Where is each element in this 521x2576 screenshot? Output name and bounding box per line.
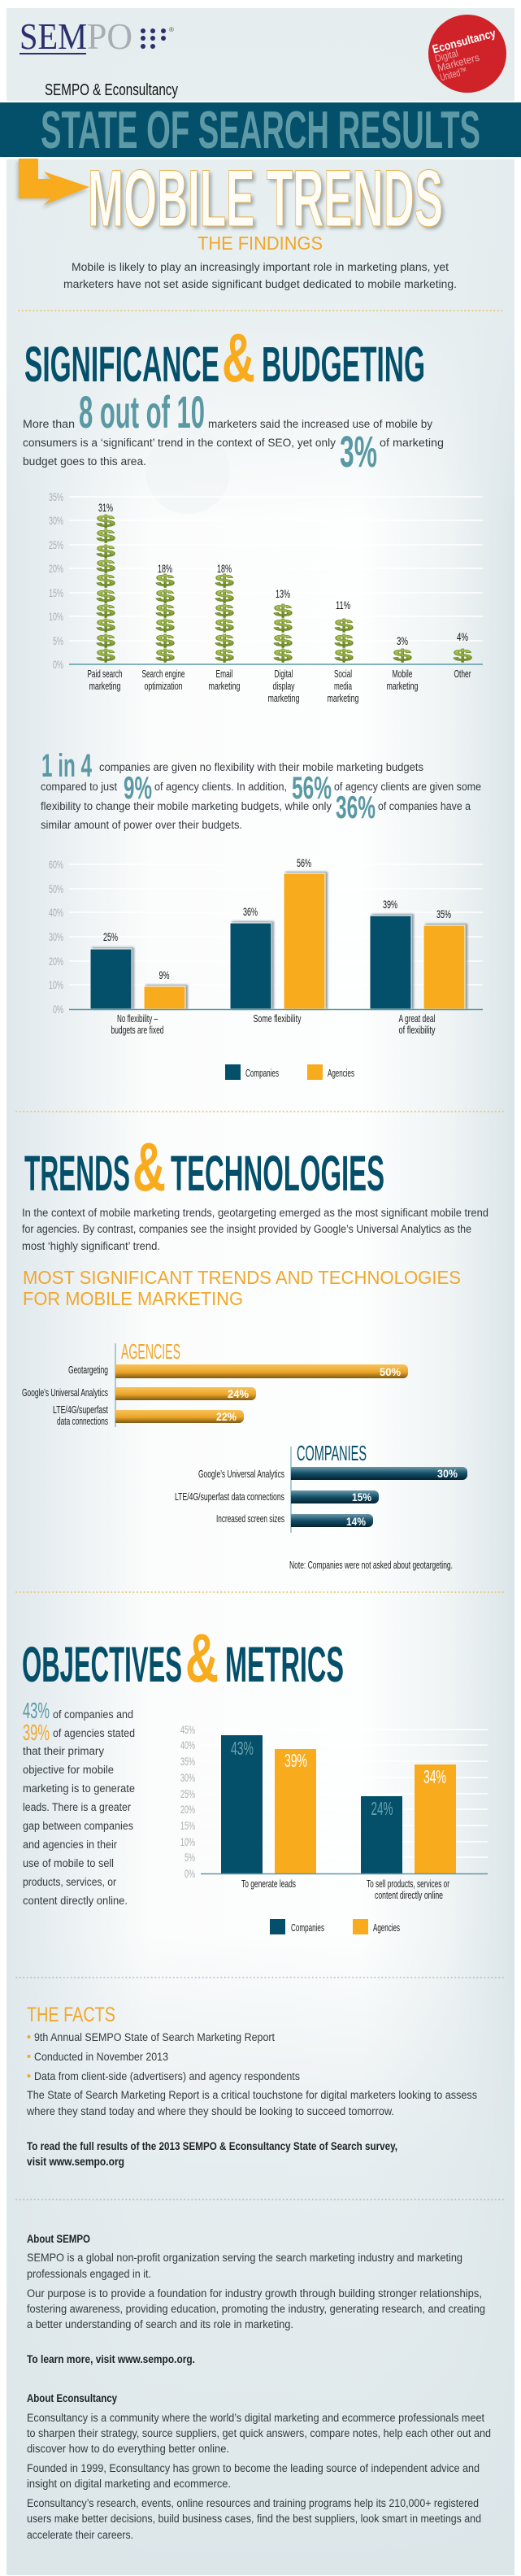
text: objectives paragraph: gap between companies <box>23 1820 133 1832</box>
labels: dollar chart categories: marketing <box>268 692 299 704</box>
text: 8 out of 10 paragraph: consumers is a ‘significant’ trend in the context of SEO, yet only <box>23 437 336 449</box>
labels: dollar chart categories: Mobile <box>392 668 413 680</box>
chart: agencies trends: data connections <box>57 1415 108 1427</box>
dollars: digital display: $ <box>273 602 293 620</box>
chart: primary objectives: 15% <box>180 1819 195 1832</box>
chart: companies trends: 30% <box>437 1467 458 1480</box>
heading: Trends & Technologies: TRENDS <box>24 1146 130 1201</box>
text: 8 out of 10 paragraph: More than <box>23 418 75 430</box>
chart: marketing budget share (dollar stacks): 25% <box>49 538 63 551</box>
chart: primary objectives: 20% <box>180 1803 195 1816</box>
bars: agencies <box>275 1749 456 1873</box>
chart: companies trends: 15% <box>352 1490 371 1503</box>
text: about SEMPO <box>27 2233 485 2365</box>
labels: dollar chart categories: Search engine <box>141 668 185 680</box>
dollars: social media <box>334 616 354 664</box>
values: dollar chart <box>98 501 468 647</box>
heading: Significance & Budgeting: SIGNIFICANCE <box>24 337 219 392</box>
text: about SEMPO: Our purpose is to provide a foundation for industry growth through building stronger relationships, <box>27 2287 482 2300</box>
text: 8 out of 10 paragraph: budget goes to this area. <box>23 455 146 468</box>
text: objectives paragraph: 43% <box>23 1698 50 1723</box>
bars: agencies <box>144 873 465 1009</box>
labels: dollar chart categories <box>88 668 471 704</box>
legend: objectives chart <box>270 1919 400 1934</box>
text: 1 in 4 paragraph <box>41 748 481 831</box>
list: facts bullets: Data from client-side (advertisers) and agency respondents <box>34 2070 300 2082</box>
text: objectives paragraph: and agencies in their <box>23 1838 117 1851</box>
chart: budget flexibility: 20% <box>49 955 63 968</box>
chart: budget flexibility: 30% <box>49 930 63 943</box>
chart: primary objectives: 40% <box>180 1738 195 1751</box>
text: 1 in 4 paragraph: 36% <box>336 790 376 825</box>
dollars: email marketing: $ <box>215 602 234 620</box>
text: about Econsultancy <box>27 2392 491 2541</box>
list: facts bullets: Conducted in November 2013 <box>34 2051 168 2063</box>
labels: flexibility categories: A great deal <box>398 1012 436 1025</box>
text: trends paragraph: for agencies. By contrast, companies see the insight provided by Google’s Universal Analytics as the <box>22 1223 471 1235</box>
dollars: search engine optimization: $ <box>155 632 175 650</box>
values: flexibility chart: 25% <box>103 930 118 943</box>
labels: dollar chart categories: marketing <box>89 680 120 692</box>
legend: objectives chart: Agencies <box>373 1921 400 1934</box>
legend: objectives chart: Companies <box>291 1921 324 1934</box>
chart: primary objectives: 25% <box>180 1787 195 1800</box>
dollars: paid search: $ <box>96 587 115 605</box>
text: call to action <box>27 2140 397 2168</box>
logo: Econsultancy badge <box>428 15 506 93</box>
text: intro paragraph: Mobile is likely to play an increasingly important role in marketing plans, yet <box>72 261 449 273</box>
text: objectives paragraph <box>23 1698 135 1907</box>
text: objectives paragraph: marketing is to generate <box>23 1782 135 1795</box>
text: intro paragraph <box>63 261 457 290</box>
values: dollar chart: 4% <box>457 630 468 643</box>
chart: marketing budget share (dollar stacks): 0% <box>53 658 63 671</box>
chart: marketing budget share (dollar stacks): 5% <box>53 634 63 647</box>
text: 1 in 4 paragraph: 56% <box>292 771 332 806</box>
dollars: email marketing: $ <box>215 646 234 664</box>
heading: Trends & Technologies <box>24 1129 384 1205</box>
chart: marketing budget share (dollar stacks): 20% <box>49 562 63 575</box>
text: about Econsultancy: Econsultancy is a community where the world’s digital marketing and ecommerce professionals meet <box>27 2412 484 2424</box>
text: 1 in 4 paragraph: of companies have a <box>378 800 471 812</box>
list: facts bullets: 9th Annual SEMPO State of Search Marketing Report <box>34 2031 275 2043</box>
text: objectives paragraph: products, services, or <box>23 1876 116 1888</box>
values: objectives chart <box>231 1738 446 1819</box>
chart: primary objectives: 45% <box>180 1723 195 1736</box>
dollars: paid search: $ <box>96 632 115 650</box>
legend: flexibility chart: Agencies <box>328 1067 354 1079</box>
dollars: paid search: $ <box>96 512 115 530</box>
text: about Econsultancy: Founded in 1999, Econsultancy has grown to become the leading source of independent advice and <box>27 2462 480 2474</box>
logo: SEMPO: SEM <box>20 15 87 57</box>
text: objectives paragraph: use of mobile to sell <box>23 1857 114 1869</box>
chart: marketing budget share (dollar stacks): 30% <box>49 514 63 527</box>
labels: dollar chart categories: Email <box>216 668 233 680</box>
chart: primary objectives <box>180 1723 488 1934</box>
dollars: email marketing: $ <box>215 632 234 650</box>
dollars: digital display: $ <box>273 646 293 664</box>
text: objectives paragraph: objective for mobile <box>23 1764 114 1776</box>
text: trends paragraph: In the context of mobile marketing trends, geotargeting emerged as the most significant mobile trend <box>22 1207 488 1219</box>
values: dollar chart: 31% <box>98 501 113 514</box>
logo: SEMPO: PO <box>87 15 132 57</box>
labels: flexibility categories: of flexibility <box>398 1024 436 1036</box>
dollars: paid search: $ <box>96 572 115 590</box>
heading: most significant trends <box>23 1267 461 1309</box>
dollars: email marketing: $ <box>215 616 234 634</box>
values: dollar chart: 3% <box>397 634 408 647</box>
labels: objectives categories: To generate leads <box>241 1878 296 1890</box>
dollars: search engine optimization <box>155 572 175 664</box>
text: SEMPO & Econsultancy: SEMPO & Econsultancy <box>45 81 178 99</box>
heading: Trends & Technologies: & <box>132 1129 166 1205</box>
text: objectives paragraph: content directly online. <box>23 1895 128 1907</box>
text: objectives paragraph: of companies and <box>53 1708 133 1721</box>
heading: Objectives & Metrics: OBJECTIVES <box>22 1637 182 1692</box>
values: objectives chart: 24% <box>371 1798 393 1819</box>
dollars: paid search: $ <box>96 542 115 560</box>
text: objectives paragraph: 39% <box>23 1720 50 1745</box>
chart: companies trends: Google’s Universal Analytics <box>198 1468 284 1480</box>
labels: dollar chart categories: Social <box>334 668 352 680</box>
dollars: digital display: $ <box>273 632 293 650</box>
heading: Significance & Budgeting <box>24 320 425 396</box>
legend: flexibility chart: Companies <box>245 1067 279 1079</box>
values: dollar chart: 18% <box>217 562 232 575</box>
text: 1 in 4 paragraph: similar amount of power over their budgets. <box>41 819 242 831</box>
bars: companies <box>90 916 411 1009</box>
chart: companies trends: LTE/4G/superfast data connections <box>175 1490 284 1503</box>
chart: companies trends: Increased screen sizes <box>216 1512 284 1525</box>
text: about Econsultancy: About Econsultancy <box>27 2392 117 2404</box>
chart: agencies trends <box>22 1339 408 1427</box>
chart: companies trends: 14% <box>346 1515 366 1528</box>
dollars: paid search <box>96 512 115 664</box>
labels: flexibility categories: No flexibility – <box>117 1012 158 1025</box>
chart: companies trends <box>175 1441 467 1533</box>
chart: budget flexibility: 0% <box>53 1003 63 1016</box>
list: facts bullets <box>28 2031 300 2082</box>
logo: Econsultancy badge: Marketers <box>436 52 480 74</box>
text: about SEMPO: a better understanding of search and its role in marketing. <box>27 2318 293 2330</box>
text: objectives paragraph: of agencies stated <box>53 1727 135 1739</box>
dollars: social media: $ <box>334 616 354 634</box>
chart: budget flexibility <box>49 856 483 1080</box>
text: about SEMPO: About SEMPO <box>27 2233 90 2245</box>
text: about Econsultancy: insight on digital marketing and ecommerce. <box>27 2478 231 2490</box>
text: objectives paragraph: that their primary <box>23 1745 104 1757</box>
values: flexibility chart: 56% <box>297 856 311 869</box>
values: dollar chart: 18% <box>158 562 172 575</box>
labels: dollar chart categories: media <box>334 680 352 692</box>
chart: agencies trends: AGENCIES <box>121 1339 180 1364</box>
text: 1 in 4 paragraph: of agency clients. In addition, <box>154 781 287 793</box>
heading: Objectives & Metrics: METRICS <box>225 1637 344 1692</box>
values: dollar chart: 11% <box>336 598 350 611</box>
dollars: digital display <box>273 602 293 664</box>
dollars: email marketing: $ <box>215 587 234 605</box>
text: 1 in 4 paragraph: companies are given no flexibility with their mobile marketing budgets <box>99 761 423 773</box>
dollars: search engine optimization: $ <box>155 616 175 634</box>
labels: objectives categories: content directly online <box>375 1889 443 1901</box>
text: 8 out of 10 paragraph <box>23 386 444 476</box>
dollars: search engine optimization: $ <box>155 572 175 590</box>
labels: dollar chart categories: marketing <box>387 680 418 692</box>
text: about SEMPO: To learn more, visit www.sempo.org. <box>27 2353 195 2365</box>
chart: budget flexibility: 50% <box>49 882 63 895</box>
chart: budget flexibility: 40% <box>49 906 63 919</box>
text: trends paragraph <box>22 1207 488 1252</box>
chart: agencies trends: Geotargeting <box>68 1364 108 1376</box>
labels: flexibility categories: Some flexibility <box>254 1012 302 1025</box>
dollars: search engine optimization: $ <box>155 602 175 620</box>
legend: flexibility chart <box>225 1064 354 1080</box>
labels: dollar chart categories: marketing <box>208 680 241 692</box>
panel: the facts <box>26 2004 477 2168</box>
logo: Econsultancy badge: Digital <box>434 47 459 64</box>
labels: dollar chart categories: Other <box>454 668 471 680</box>
chart: agencies trends: LTE/4G/superfast <box>53 1403 108 1416</box>
values: objectives chart: 34% <box>423 1766 446 1787</box>
text: about Econsultancy: discover how to do everything better online. <box>27 2443 229 2455</box>
chart: agencies trends: 22% <box>216 1410 237 1423</box>
text: about Econsultancy: to sharpen their strategy, source suppliers, get quick answers, compare notes, help each other out and <box>27 2427 491 2439</box>
heading: Significance & Budgeting: & <box>222 320 255 396</box>
chart: companies trends: COMPANIES <box>297 1441 367 1465</box>
dollars: paid search: $ <box>96 602 115 620</box>
text: 8 out of 10 paragraph: marketers said the increased use of mobile by <box>208 418 432 430</box>
chart: budget flexibility: 60% <box>49 858 63 871</box>
chart: marketing budget share (dollar stacks): 35% <box>49 490 63 503</box>
labels: flexibility categories <box>111 1012 436 1036</box>
bar shadows <box>92 872 467 1009</box>
dollars: social media: $ <box>334 646 354 664</box>
text: 8 out of 10 paragraph: 3% <box>340 428 377 476</box>
text: 8 out of 10 paragraph: 8 out of 10 <box>79 386 205 437</box>
values: dollar chart: 13% <box>276 587 290 600</box>
values: flexibility chart: 35% <box>436 907 451 920</box>
heading: Objectives & Metrics: & <box>185 1620 219 1696</box>
dollars: search engine optimization: $ <box>155 646 175 664</box>
values: flexibility chart: 39% <box>383 898 397 911</box>
values: flexibility chart: 36% <box>243 905 258 918</box>
text: objectives paragraph: leads. There is a greater <box>23 1801 131 1813</box>
logo: Econsultancy badge: United™ <box>439 65 468 83</box>
text: intro paragraph: marketers have not set aside significant budget dedicated to mobile marketing. <box>63 278 457 290</box>
labels: dollar chart categories: display <box>273 680 295 692</box>
values: flexibility chart <box>103 856 451 981</box>
text: 1 in 4 paragraph: 9% <box>124 771 152 806</box>
text: trends paragraph: most ‘highly significant’ trend. <box>22 1240 160 1252</box>
text: report description <box>26 2089 477 2117</box>
text: about SEMPO: SEMPO is a global non-profit organization serving the search marketing industry and marketing <box>27 2252 462 2264</box>
text: 8 out of 10 paragraph: of marketing <box>380 437 444 449</box>
dollars: paid search: $ <box>96 557 115 575</box>
chart: primary objectives: 30% <box>180 1771 195 1784</box>
dollars: paid search: $ <box>96 616 115 634</box>
values: objectives chart: 39% <box>284 1750 307 1771</box>
heading: The Facts: THE FACTS <box>27 2004 115 2026</box>
text: about Econsultancy: users make better decisions, build business cases, find the best suppliers, look smart in meetings and <box>27 2513 481 2525</box>
text: 1 in 4 paragraph: flexibility to change their mobile marketing budgets, while only <box>41 800 332 812</box>
logo: Econsultancy badge: Econsultancy <box>431 27 497 57</box>
text: call to action: To read the full results of the 2013 SEMPO & Econsultancy State of Search survey, <box>27 2140 397 2152</box>
arrow: orange pointer <box>17 159 89 208</box>
dollars: digital display: $ <box>273 616 293 634</box>
chart: primary objectives: 10% <box>180 1835 195 1848</box>
chart: primary objectives: 0% <box>185 1867 195 1880</box>
text: report description: The State of Search Marketing Report is a critical touchstone for digital marketers looking to assess <box>27 2089 477 2101</box>
heading: most significant trends: MOST SIGNIFICANT TRENDS AND TECHNOLOGIES <box>23 1267 461 1288</box>
logo: SEMPO: ® <box>169 26 174 33</box>
dollars: search engine optimization: $ <box>155 587 175 605</box>
text: call to action: visit www.sempo.org <box>27 2156 124 2168</box>
bars: companies <box>221 1735 402 1873</box>
text: about Econsultancy: accelerate their careers. <box>27 2529 133 2541</box>
chart: agencies trends: 50% <box>380 1365 402 1378</box>
heading: The Findings: THE FINDINGS <box>198 233 323 254</box>
dollars: other: $ <box>453 646 472 664</box>
heading: most significant trends: FOR MOBILE MARKETING <box>23 1288 243 1309</box>
text: 1 in 4 paragraph: 1 in 4 <box>41 748 92 784</box>
values: objectives chart: 43% <box>231 1738 254 1759</box>
dollars: mobile marketing: $ <box>393 646 412 664</box>
text: 1 in 4 paragraph: of agency clients are given some <box>334 781 481 793</box>
dollars: social media: $ <box>334 632 354 650</box>
labels: dollar chart categories: marketing <box>327 692 359 704</box>
text: about SEMPO: professionals engaged in it. <box>27 2268 151 2280</box>
chart: primary objectives: 35% <box>180 1755 195 1768</box>
chart: marketing budget share (dollar stacks): 15% <box>49 586 63 599</box>
text: 1 in 4 paragraph: compared to just <box>41 781 117 793</box>
dollars: paid search: $ <box>96 646 115 664</box>
labels: dollar chart categories: Digital <box>275 668 293 680</box>
labels: flexibility categories: budgets are fixed <box>111 1024 164 1036</box>
chart: agencies trends: 24% <box>228 1387 250 1400</box>
logo: SEMPO <box>20 15 174 57</box>
text: about Econsultancy: Econsultancy’s research, events, online resources and training programs help its 210,000+ registered <box>27 2497 479 2509</box>
chart: agencies trends: Google’s Universal Analytics <box>22 1386 108 1399</box>
labels: dollar chart categories: Paid search <box>88 668 122 680</box>
dollars: email marketing <box>215 572 234 664</box>
labels: objectives categories: To sell products, services or <box>367 1878 449 1890</box>
chart: budget flexibility: 10% <box>49 978 63 991</box>
chart: primary objectives: 5% <box>185 1851 195 1864</box>
text: report description: where they stand today and where they should be looking to succeed tomorrow. <box>26 2105 394 2117</box>
labels: objectives categories <box>241 1878 449 1901</box>
chart: marketing budget share (dollar stacks): 10% <box>49 610 63 623</box>
chart: marketing budget share (dollar stacks) <box>49 490 483 704</box>
dollars: email marketing: $ <box>215 572 234 590</box>
values: flexibility chart: 9% <box>159 968 169 981</box>
dollars: paid search: $ <box>96 527 115 545</box>
text: about SEMPO: fostering awareness, providing education, promoting the industry, generating research, and creating <box>27 2303 485 2315</box>
labels: dollar chart categories: optimization <box>145 680 182 692</box>
